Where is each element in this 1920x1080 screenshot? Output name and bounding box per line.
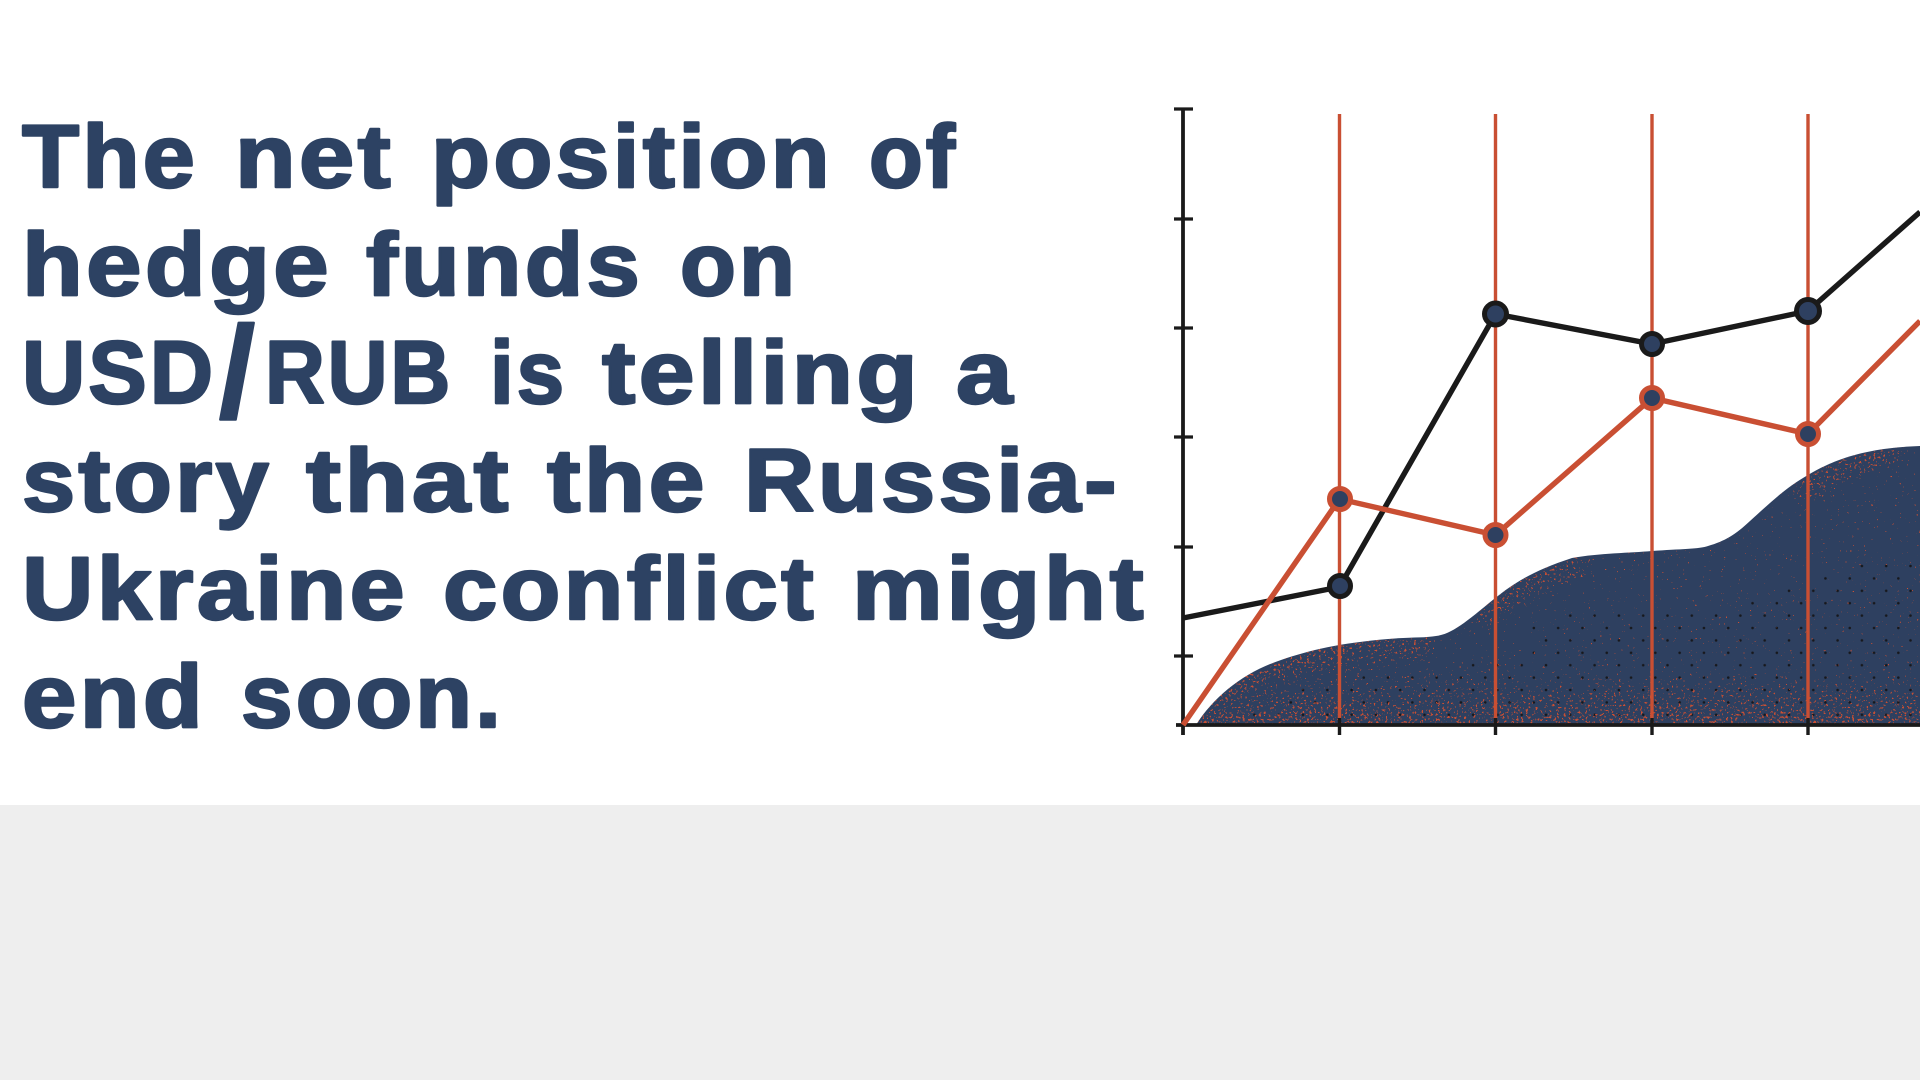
title line 4: Russia- xyxy=(744,430,1120,530)
title line 4: story xyxy=(22,430,272,530)
title line 2: funds xyxy=(366,214,643,314)
title line 4: that xyxy=(306,430,512,530)
title line 2: hedge xyxy=(22,214,332,314)
title line 3: is xyxy=(490,322,567,422)
title line 3: telling xyxy=(602,322,921,422)
title line 1: The xyxy=(22,106,198,206)
title line 4 xyxy=(22,430,1120,530)
title line 2 xyxy=(22,214,798,314)
title line 5 xyxy=(22,538,1147,638)
title line 2: on xyxy=(680,214,798,314)
background: grey lower band xyxy=(0,805,1920,1080)
background: white upper section xyxy=(0,0,1920,805)
red line series xyxy=(1183,321,1920,725)
title line 3: a xyxy=(956,322,1016,422)
title line 1: net xyxy=(235,106,394,206)
title line 1 xyxy=(22,106,958,206)
title line 3: / xyxy=(219,299,258,445)
area series with dot and speckle texture xyxy=(1190,446,1920,730)
title line 6: soon. xyxy=(241,646,504,746)
title line 3 xyxy=(22,299,1016,445)
black line series xyxy=(1183,212,1920,618)
title line 3: RUB xyxy=(265,322,453,422)
red vertical guide lines xyxy=(1340,114,1808,720)
axes with tick marks xyxy=(1174,109,1920,735)
title line 1: position xyxy=(431,106,833,206)
title line 1: of xyxy=(869,106,958,206)
red series markers xyxy=(1330,388,1818,546)
title line 6 xyxy=(22,646,504,746)
title line 5: might xyxy=(852,538,1147,638)
title xyxy=(22,106,1147,746)
title line 5: Ukraine xyxy=(22,538,408,638)
chart xyxy=(1174,109,1920,735)
title line 3: USD xyxy=(22,322,216,422)
title line 5: conflict xyxy=(443,538,817,638)
black series markers xyxy=(1330,300,1820,596)
title line 4: the xyxy=(547,430,708,530)
title line 6: end xyxy=(22,646,206,746)
